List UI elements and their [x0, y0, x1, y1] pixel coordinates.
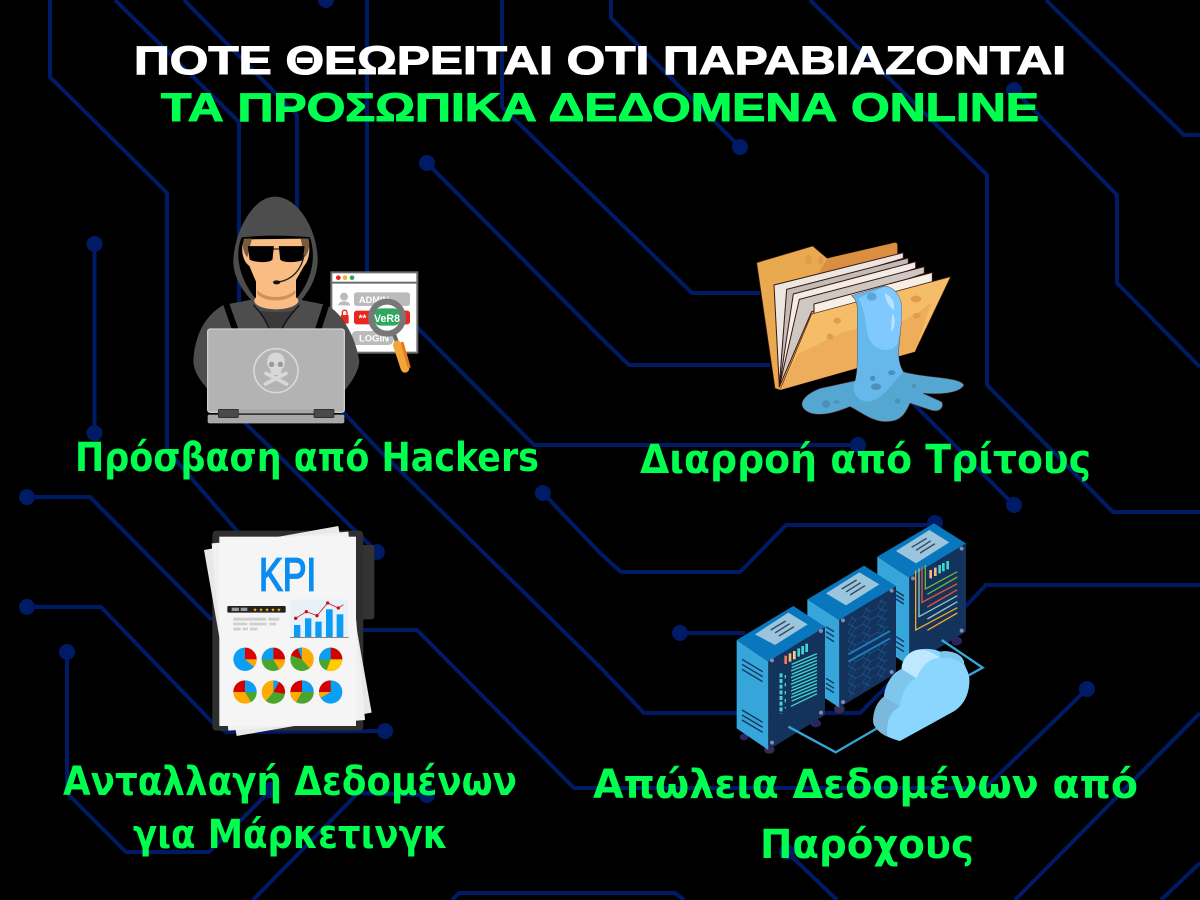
- folder front: [780, 277, 951, 390]
- title line 1: ΠΟΤΕ ΘΕΩΡΕΙΤΑΙ ΟΤΙ ΠΑΡΑΒΙΑΖΟΝΤΑΙ: [134, 39, 1066, 83]
- login window: **: [359, 313, 367, 324]
- panel: hackers: [75, 197, 539, 481]
- login window: ADMIN: [359, 295, 389, 305]
- back sheets: [204, 526, 372, 736]
- server 2: [807, 566, 896, 713]
- login window: [331, 272, 417, 353]
- hood opening: [238, 236, 313, 299]
- title line 2: ΤΑ ΠΡΟΣΩΠΙΚΑ ΔΕΔΟΜΕΝΑ ONLINE: [161, 86, 1039, 130]
- panel: marketing data: [63, 526, 517, 858]
- bar and line chart: [290, 599, 349, 638]
- icon: hacker at laptop: [193, 197, 417, 423]
- laptop: [208, 329, 344, 423]
- hair: [243, 239, 309, 257]
- stream highlight: [852, 286, 903, 402]
- icon: servers and cloud: [737, 523, 983, 754]
- KPI heading: KPI: [259, 549, 316, 601]
- label: marketing data: για Μάρκετινγκ: [133, 812, 448, 858]
- label: provider data loss: Παρόχους: [760, 822, 974, 868]
- label: marketing data: [63, 759, 517, 858]
- login window: LOGIN: [359, 334, 389, 344]
- folder back: [757, 243, 897, 390]
- paper stack: [774, 253, 932, 387]
- icon: KPI report: [204, 526, 374, 736]
- face and neck: [242, 239, 309, 309]
- water puddle and stream: [802, 286, 964, 422]
- rating bar: [227, 606, 286, 613]
- label: hackers: Πρόσβαση από Hackers: [75, 435, 539, 481]
- magnifier: VeR8: [374, 313, 400, 325]
- panel: provider data loss: [593, 523, 1138, 868]
- network wires: [788, 640, 983, 752]
- label: provider data loss: Απώλεια Δεδομένων από: [593, 762, 1138, 808]
- pie charts: [233, 648, 342, 704]
- magnifier: [371, 302, 409, 368]
- binder: [212, 531, 374, 731]
- label: marketing data: Ανταλλαγή Δεδομένων: [63, 759, 517, 805]
- text lines: [233, 618, 279, 630]
- icon: leaking folder: [757, 243, 964, 422]
- sunglasses: [248, 247, 304, 262]
- headset mic: [279, 255, 304, 282]
- server 3: [877, 523, 966, 666]
- shirt and straps: [223, 304, 329, 329]
- panel: third party leak: [640, 243, 1091, 483]
- hood: [233, 197, 318, 304]
- server 1: [737, 606, 825, 754]
- label: third party leak: Διαρροή από Τρίτους: [640, 437, 1091, 483]
- front sheet: [219, 537, 356, 726]
- rating bar: ★★★★★: [253, 607, 282, 613]
- title: [134, 39, 1066, 130]
- label: provider data loss: [593, 762, 1138, 868]
- hacker body: [193, 299, 359, 390]
- cloud: [873, 649, 969, 741]
